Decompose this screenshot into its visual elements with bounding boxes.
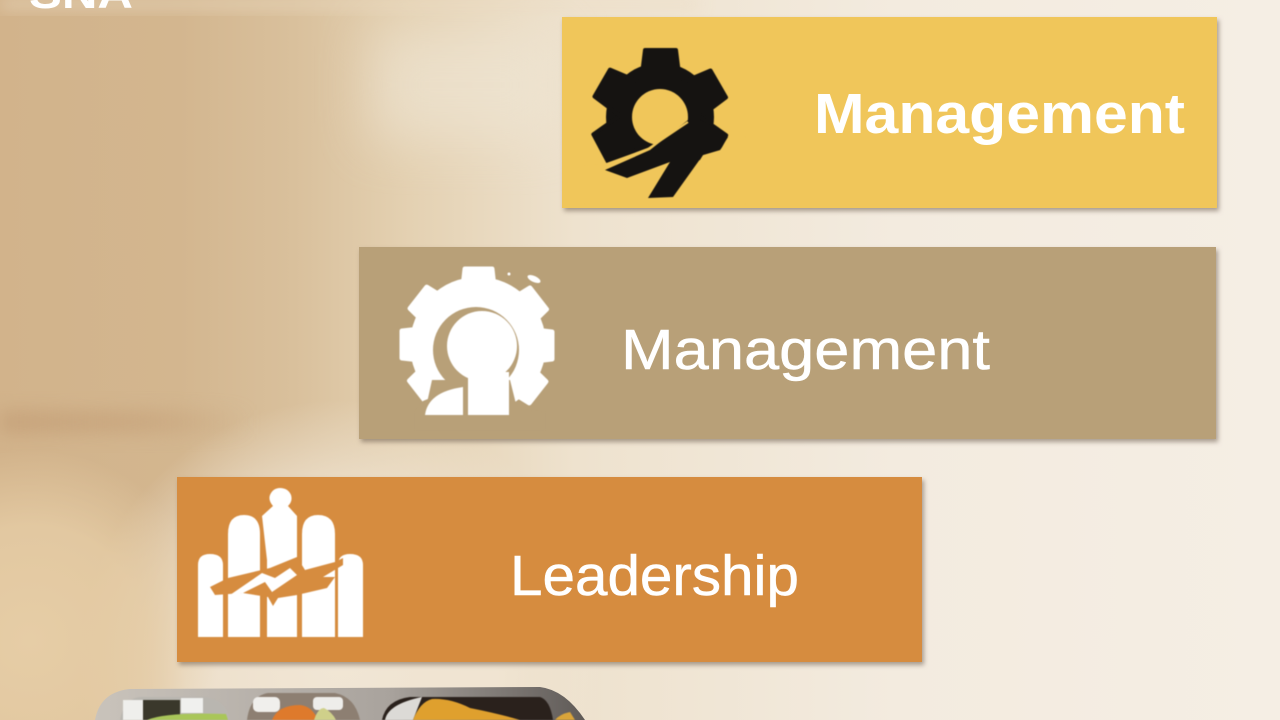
panel: leadership	[177, 477, 922, 662]
panel background: orange	[177, 477, 922, 662]
panel: top management	[562, 17, 1217, 208]
photo: steel food tray, cropped by bottom edge	[95, 687, 585, 720]
icon: white columns with orange swoosh	[198, 488, 363, 637]
label: Leadership: Leadership	[510, 544, 799, 608]
panel background: tan	[359, 247, 1216, 439]
tray compartment: yellow rice	[382, 697, 575, 720]
label: Management: Management	[621, 318, 990, 382]
icon: black gear with swoosh	[585, 50, 745, 204]
icon: white gear with person	[402, 269, 552, 430]
tray compartment: green vegetables	[120, 697, 230, 720]
panel background: yellow	[562, 17, 1217, 208]
panel: middle management	[359, 247, 1216, 439]
tray compartment: carrot and cucumber	[247, 693, 360, 720]
label: Management (bold): Management	[814, 82, 1185, 146]
